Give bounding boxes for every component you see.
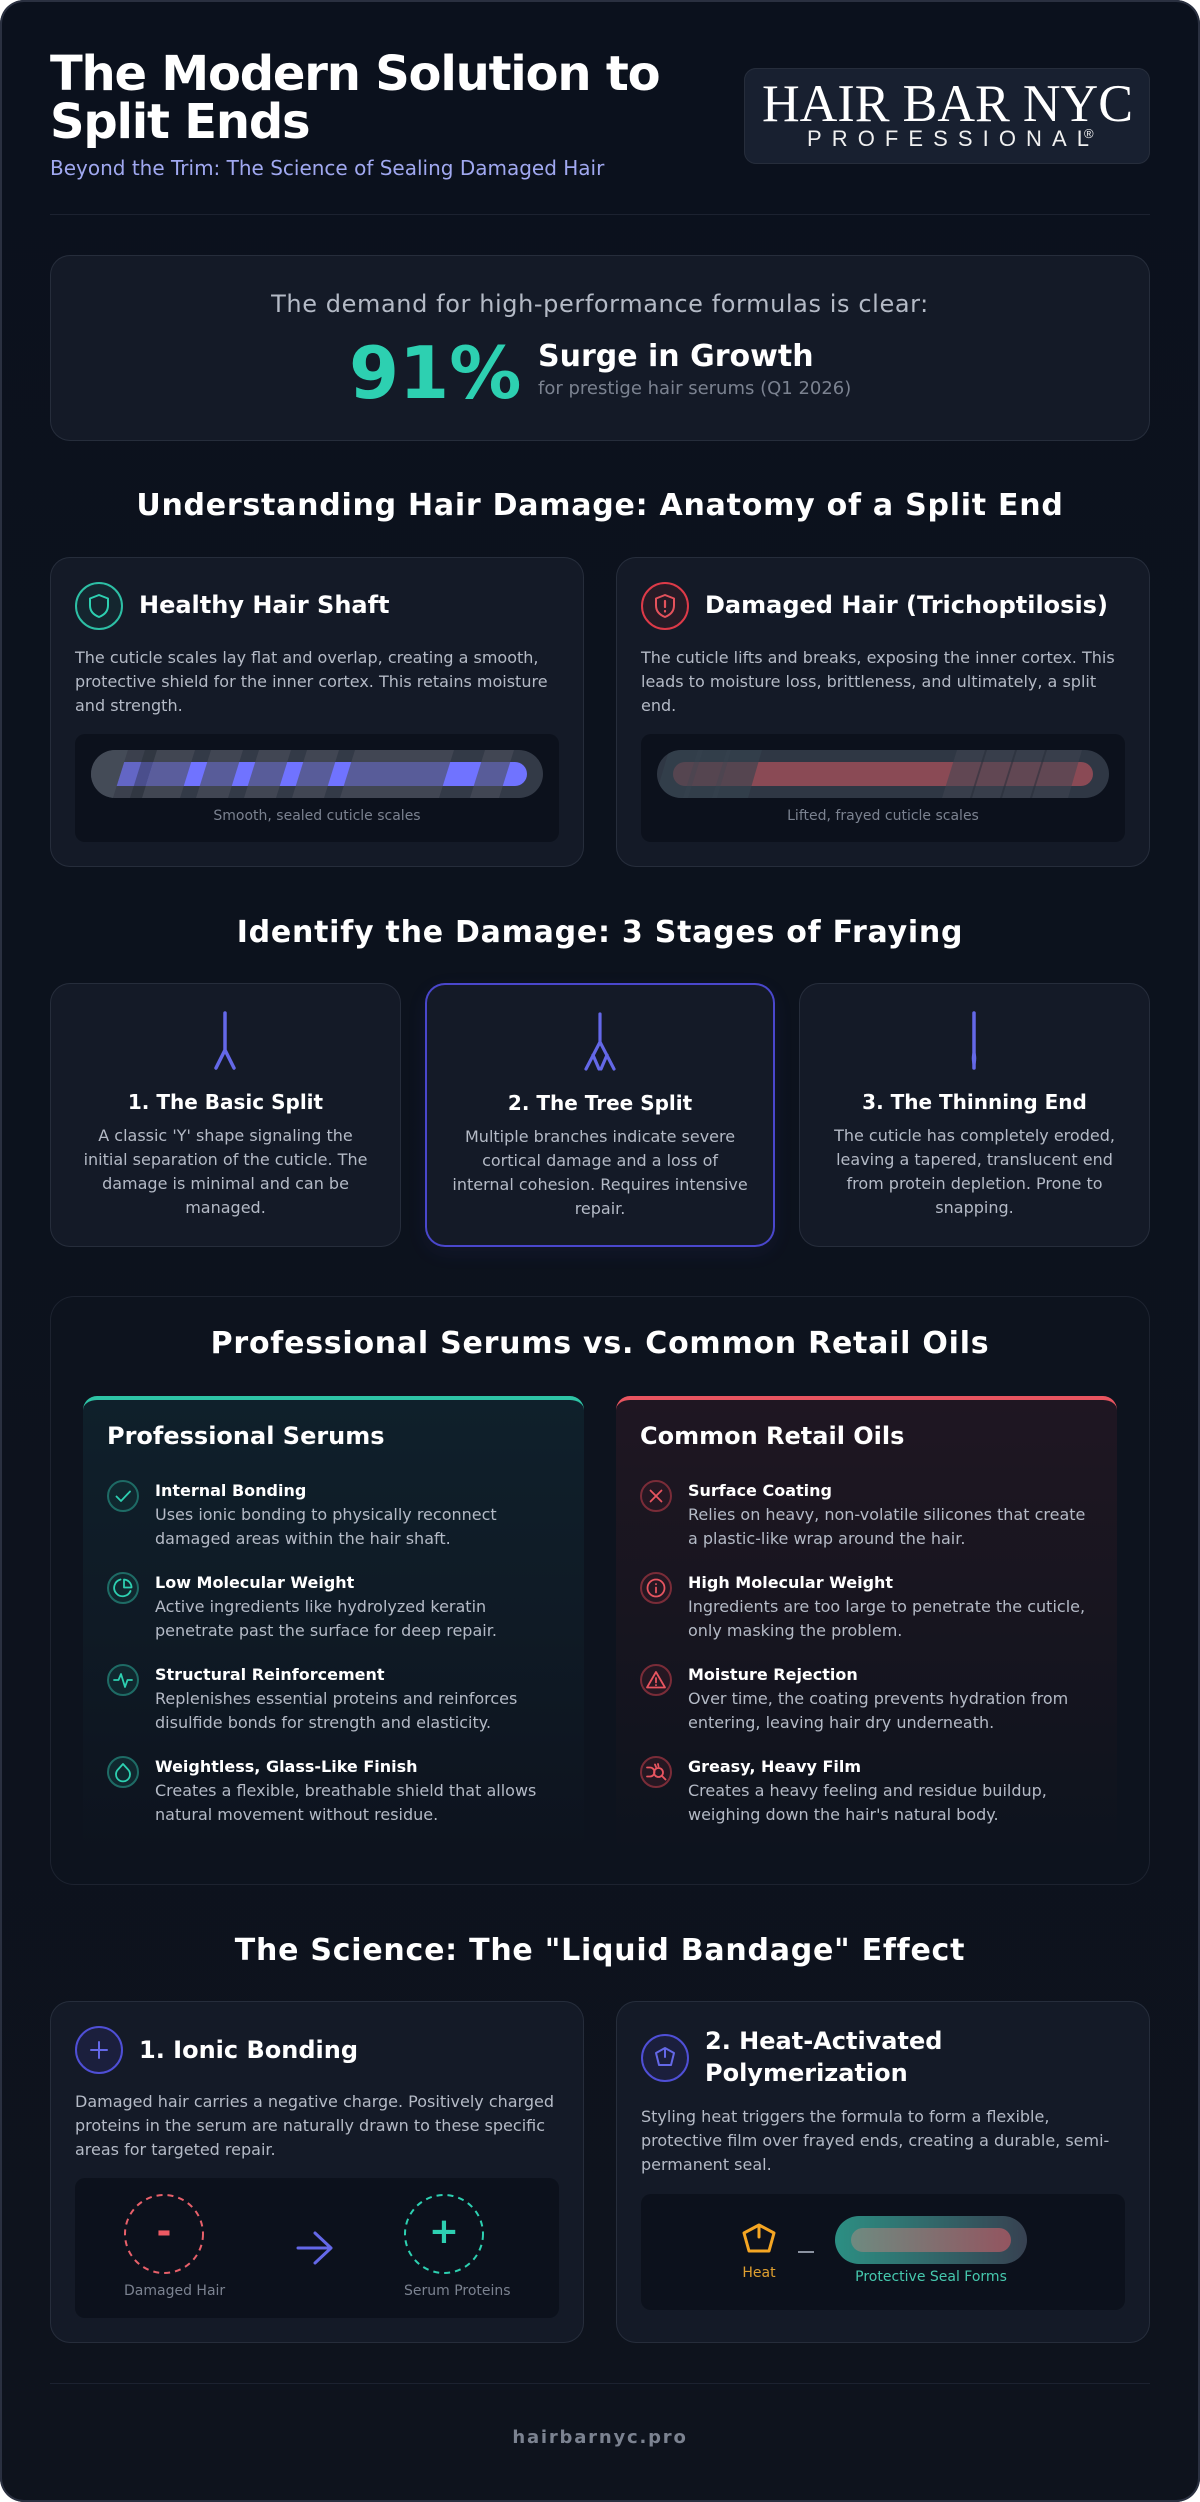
item text	[688, 1481, 1085, 1548]
stage description: snapping.	[935, 1198, 1014, 1217]
icon: check	[107, 1480, 139, 1512]
stage description: The cuticle has completely eroded,	[834, 1126, 1115, 1145]
item text: Ingredients are too large to penetrate the cuticle,	[688, 1597, 1085, 1616]
stage description: damage is minimal and can be	[102, 1174, 349, 1193]
card description: protective shield for the inner cortex. This retains moisture	[75, 672, 548, 691]
item: weightless finish	[107, 1756, 536, 1824]
item text: Weightless, Glass-Like Finish	[155, 1757, 418, 1776]
item: high molecular weight	[640, 1572, 1085, 1640]
item text	[155, 1757, 536, 1824]
arrow	[296, 2231, 333, 2265]
item text	[155, 1665, 517, 1732]
card title: 2. Heat-Activated	[705, 2027, 942, 2055]
seal pill	[835, 2216, 1027, 2264]
positive charge circle	[404, 2194, 484, 2274]
panel: healthy hair shaft	[50, 557, 584, 867]
diagram: heat seal	[641, 2194, 1125, 2310]
item text: damaged areas within the hair shaft.	[155, 1529, 451, 1548]
heat icon	[742, 2224, 776, 2252]
stage description	[452, 1127, 748, 1218]
icon: warning triangle	[640, 1664, 672, 1696]
item text: Creates a flexible, breathable shield that allows	[155, 1781, 536, 1800]
card description: protective film over frayed ends, creating a durable, semi-	[641, 2131, 1109, 2150]
diagram caption: Smooth, sealed cuticle scales	[213, 808, 421, 824]
card title: Polymerization	[705, 2059, 908, 2087]
panel: comparison	[50, 1296, 1150, 1885]
card description	[75, 2092, 554, 2159]
stage description: initial separation of the cuticle. The	[84, 1150, 367, 1169]
heat label: Heat	[742, 2265, 776, 2281]
stage description: internal cohesion. Requires intensive	[452, 1175, 748, 1194]
icon: tapered strand	[972, 1011, 976, 1070]
item text: Over time, the coating prevents hydration from	[688, 1689, 1068, 1708]
comparison heading: Professional Serums vs. Common Retail Oils	[211, 1326, 989, 1361]
negative charge circle	[124, 2194, 204, 2274]
icon: x	[640, 1480, 672, 1512]
card description: Damaged hair carries a negative charge. Positively charged	[75, 2092, 554, 2111]
footer url: hairbarnyc.pro	[512, 2427, 688, 2448]
card description	[641, 2107, 1109, 2174]
diagram: ionic attraction	[75, 2178, 559, 2318]
label: damaged hair: Damaged Hair	[124, 2283, 225, 2299]
item text	[688, 1665, 1068, 1732]
item text: only masking the problem.	[688, 1621, 902, 1640]
card description	[74, 648, 548, 715]
item text	[688, 1757, 1047, 1824]
item text: Relies on heavy, non-volatile silicones that create	[688, 1505, 1085, 1524]
stat sublabel: for prestige hair serums (Q1 2026)	[538, 378, 851, 399]
stat intro text: The demand for high-performance formulas is clear:	[271, 290, 929, 318]
icon: info	[640, 1572, 672, 1604]
item text: Greasy, Heavy Film	[688, 1757, 861, 1776]
stat panel: 91% growth	[50, 255, 1150, 441]
stage title: 3. The Thinning End	[862, 1090, 1087, 1114]
diagram: frayed cuticle	[641, 734, 1125, 842]
item: moisture rejection	[640, 1664, 1068, 1732]
column: professional serums	[83, 1396, 584, 1852]
card description: The cuticle lifts and breaks, exposing the inner cortex. This	[641, 648, 1115, 667]
icon: heat	[641, 2034, 689, 2082]
stage description: repair.	[575, 1199, 625, 1218]
stat number: 91%	[349, 331, 521, 415]
icon: shield	[75, 582, 123, 630]
connector arrow	[798, 2251, 814, 2253]
inner seal bar	[851, 2228, 1011, 2252]
item: surface coating	[640, 1480, 1085, 1548]
card description: and strength.	[75, 696, 183, 715]
section heading: stages: Identify the Damage: 3 Stages of Fraying	[237, 915, 963, 950]
header title	[50, 46, 659, 150]
card title: 1. Ionic Bonding	[139, 2036, 358, 2064]
card title: Damaged Hair (Trichoptilosis)	[705, 591, 1108, 619]
item text: Structural Reinforcement	[155, 1665, 385, 1684]
card description: end.	[641, 696, 676, 715]
item text: Surface Coating	[688, 1481, 832, 1500]
item text: penetrate past the surface for deep repair.	[155, 1621, 497, 1640]
item text	[155, 1481, 497, 1548]
card title	[705, 2027, 942, 2087]
item text: entering, leaving hair dry underneath.	[688, 1713, 994, 1732]
diagram: smooth cuticle	[75, 734, 559, 842]
item text	[155, 1573, 497, 1640]
card description: proteins in the serum are naturally drawn to these specific	[75, 2116, 545, 2135]
item text: Low Molecular Weight	[155, 1573, 354, 1592]
header subtitle: Beyond the Trim: The Science of Sealing Damaged Hair	[50, 156, 604, 180]
section heading: anatomy: Understanding Hair Damage: Anatomy of a Split End	[136, 488, 1064, 523]
item text: Uses ionic bonding to physically reconnect	[155, 1505, 497, 1524]
item text: Internal Bonding	[155, 1481, 306, 1500]
card description: areas for targeted repair.	[75, 2140, 276, 2159]
column title: Professional Serums	[107, 1422, 385, 1450]
stage description: cortical damage and a loss of	[482, 1151, 718, 1170]
icon: search off	[640, 1756, 672, 1788]
item text: Replenishes essential proteins and reinforces	[155, 1689, 517, 1708]
item text: Active ingredients like hydrolyzed keratin	[155, 1597, 486, 1616]
logo: Hair Bar NYC Professional: HAIR BAR NYC	[762, 75, 1133, 133]
stage description: leaving a tapered, translucent end	[836, 1150, 1113, 1169]
item text: Creates a heavy feeling and residue buildup,	[688, 1781, 1047, 1800]
label: serum proteins: Serum Proteins	[404, 2283, 511, 2299]
plus sign: +	[429, 2211, 459, 2252]
stat label: Surge in Growth	[538, 339, 814, 374]
item text: disulfide bonds for strength and elasticity.	[155, 1713, 491, 1732]
item text: High Molecular Weight	[688, 1573, 893, 1592]
stage description: A classic 'Y' shape signaling the	[98, 1126, 353, 1145]
item: greasy film	[640, 1756, 1047, 1824]
item text: weighing down the hair's natural body.	[688, 1805, 999, 1824]
stage title: 1. The Basic Split	[128, 1090, 323, 1114]
card title: Healthy Hair Shaft	[139, 591, 390, 619]
stage description	[834, 1126, 1115, 1217]
icon: Y split	[214, 1011, 236, 1070]
card description: The cuticle scales lay flat and overlap, creating a smooth,	[75, 648, 538, 667]
column: common retail oils	[616, 1396, 1117, 1852]
logo: Hair Bar NYC Professional: PROFESSIONAL	[807, 126, 1089, 151]
icon: tree split	[584, 1012, 616, 1071]
logo: Hair Bar NYC Professional: ®	[1084, 126, 1094, 141]
card description: permanent seal.	[641, 2155, 772, 2174]
icon: pie chart	[107, 1572, 139, 1604]
icon: shield alert	[641, 582, 689, 630]
item text	[688, 1573, 1085, 1640]
stage description: from protein depletion. Prone to	[846, 1174, 1103, 1193]
item: structural reinforcement	[107, 1664, 517, 1732]
item: low molecular weight	[107, 1572, 497, 1640]
stage description: Multiple branches indicate severe	[465, 1127, 735, 1146]
stage description: managed.	[185, 1198, 266, 1217]
stage title: 2. The Tree Split	[508, 1091, 692, 1115]
panel: stage 2 tree split (highlighted)	[425, 983, 775, 1247]
section heading: science: The Science: The "Liquid Bandage" Effect	[235, 1933, 965, 1968]
panel: ionic bonding	[50, 2001, 584, 2343]
card description	[640, 648, 1115, 715]
stage description	[84, 1126, 367, 1217]
panel: damaged hair	[616, 557, 1150, 867]
minus sign: -	[157, 2211, 171, 2252]
header title: Split Ends	[50, 94, 309, 150]
item: internal bonding	[107, 1480, 497, 1548]
icon: droplet	[107, 1756, 139, 1788]
header title: The Modern Solution to	[50, 46, 659, 102]
icon: plus	[75, 2026, 123, 2074]
item text: a plastic-like wrap around the hair.	[688, 1529, 965, 1548]
panel: stage 3 thinning end	[799, 983, 1150, 1247]
logo: Hair Bar NYC Professional	[744, 68, 1150, 164]
icon: activity	[107, 1664, 139, 1696]
card description: Styling heat triggers the formula to form a flexible,	[641, 2107, 1049, 2126]
seal label: Protective Seal Forms	[855, 2269, 1007, 2285]
diagram caption: Lifted, frayed cuticle scales	[787, 808, 979, 824]
column title: Common Retail Oils	[640, 1422, 904, 1450]
panel: heat polymerization	[616, 2001, 1150, 2343]
item text: natural movement without residue.	[155, 1805, 438, 1824]
item text: Moisture Rejection	[688, 1665, 858, 1684]
panel: stage 1 basic split	[50, 983, 401, 1247]
card description: leads to moisture loss, brittleness, and ultimately, a split	[641, 672, 1096, 691]
